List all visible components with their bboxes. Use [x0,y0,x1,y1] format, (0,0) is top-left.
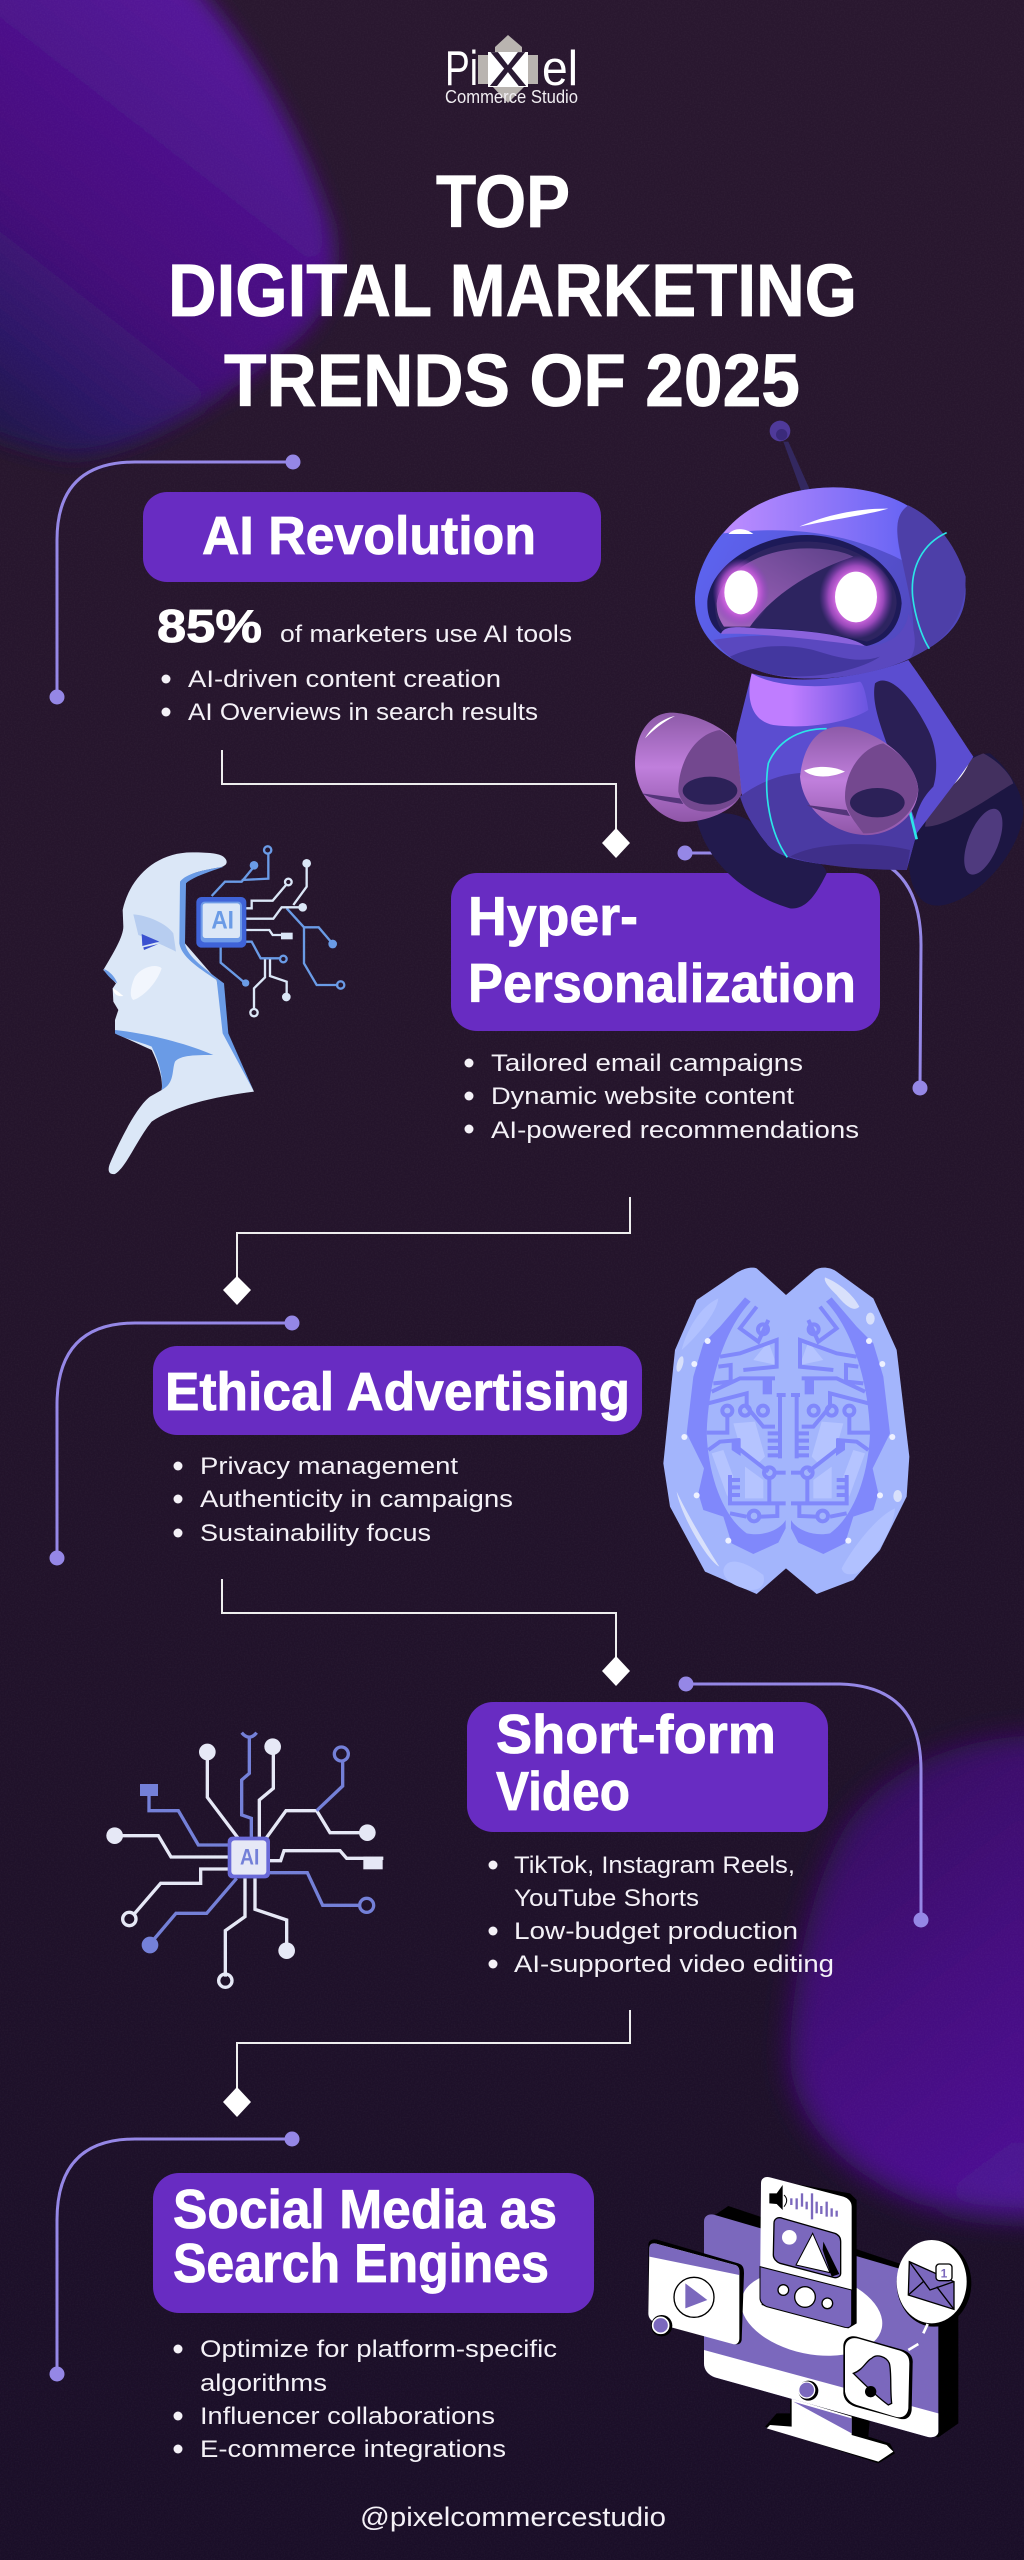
bullet list: AI-supported video editing [514,1951,834,1978]
icon: logo mark: x [489,28,527,100]
icon: AI circuit chip [106,1733,383,1987]
icon: monitor with media cards [648,2177,971,2463]
bullet list: Low-budget production [514,1918,798,1945]
panel: Ethical Advertising [50,1316,642,1566]
bullet list: Optimize for platform-specific [200,2336,557,2363]
panel: AI Revolution [50,454,601,726]
bullet list [174,1453,513,1547]
arrow: connector to Social Media [223,2010,630,2117]
bullet list: Privacy management [200,1453,458,1480]
bullet list [162,666,538,726]
decorative purple blob top left [0,0,334,456]
connector line [50,1316,300,1566]
heading pill [467,1702,828,1832]
heading pill: Social Media as [173,2178,557,2240]
icon: robot [635,421,1023,908]
icon: circuit brain [663,1268,909,1594]
arrow: connector to Ethical Advertising [223,1197,630,1305]
heading pill: Hyper- [468,885,638,947]
heading pill: Short-form [496,1703,776,1765]
bullet list: algorithms [200,2370,327,2397]
panel: Hyper-Personalization [451,846,928,1144]
decorative purple blob right [790,1735,1024,2218]
icon: AI head [103,846,344,1174]
heading pill: AI Revolution [202,506,536,566]
icon: monitor with media cards: 1 [941,2266,948,2280]
footer handle: @pixelcommercestudio [360,2502,666,2532]
title: TRENDS OF 2025 [224,339,800,422]
connector line [50,454,300,704]
statistic: of marketers use AI tools [280,621,572,648]
connector line [50,2132,300,2382]
heading pill [153,1346,642,1435]
logo: Pi [445,42,478,96]
bullet list: AI-driven content creation [188,666,501,693]
bullet list: Influencer collaborations [200,2403,495,2430]
heading pill [153,2173,594,2313]
bullet list: AI Overviews in search results [188,699,538,726]
statistic: 85% [157,600,262,652]
heading pill [143,492,601,582]
panel: Social Media as Search Engines [50,2132,594,2463]
bullet list: AI-powered recommendations [491,1117,859,1144]
bullet list [488,1852,834,1978]
heading pill [451,873,880,1031]
icon: AI circuit chip: AI [240,1845,259,1870]
panel: Short-form Video [467,1676,928,1978]
icon: AI head: AI [211,907,234,935]
heading pill: Personalization [468,952,856,1014]
heading pill: Search Engines [173,2232,549,2294]
connector line [678,846,928,1096]
bullet list: Sustainability focus [200,1520,431,1547]
bullet list [464,1050,859,1144]
bullet list: Authenticity in campaigns [200,1486,513,1513]
bullet list: Dynamic website content [491,1083,794,1110]
bullet list: YouTube Shorts [514,1885,699,1912]
statistic [157,600,572,652]
bullet list: Tailored email campaigns [491,1050,803,1077]
logo: el [542,42,578,96]
arrow: connector to Short-form Video [222,1579,630,1686]
heading pill: Video [496,1760,630,1822]
heading pill: Ethical Advertising [165,1362,630,1422]
title: DIGITAL MARKETING [168,249,857,332]
logo: Commerce Studio [445,87,578,107]
title [168,160,857,422]
connector line [678,1676,928,1928]
title: TOP [436,160,570,243]
arrow: connector to Hyper-Personalization [222,750,630,858]
bullet list: TikTok, Instagram Reels, [514,1852,795,1879]
bullet list [174,2336,557,2463]
logo [445,28,578,107]
bullet list: E-commerce integrations [200,2436,506,2463]
